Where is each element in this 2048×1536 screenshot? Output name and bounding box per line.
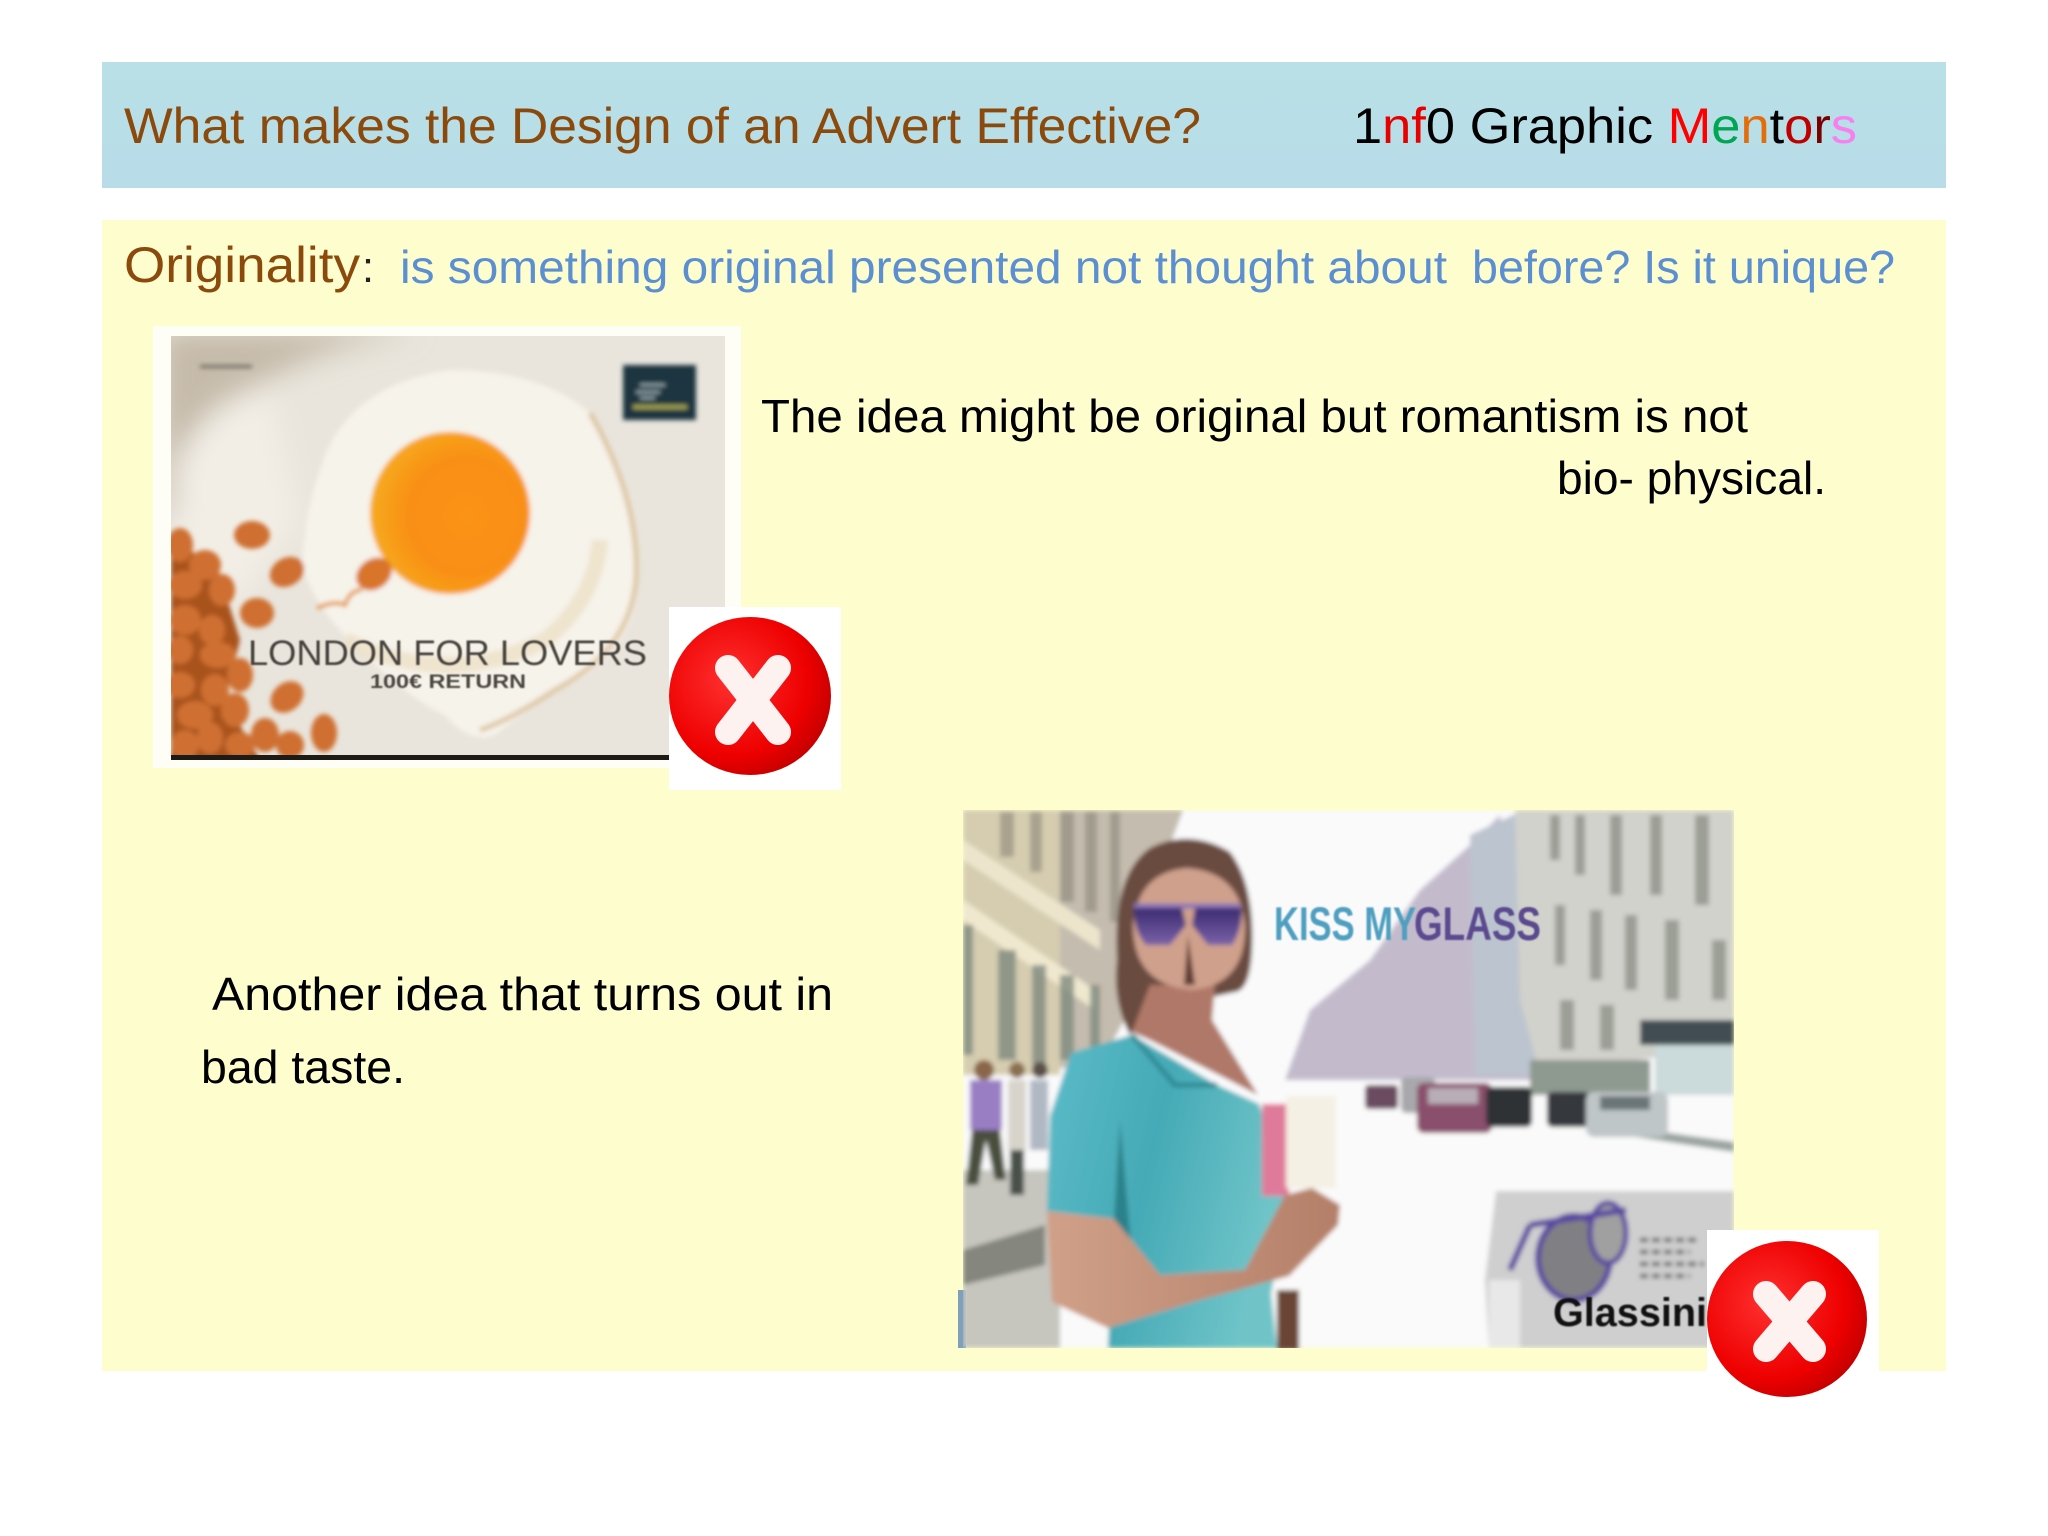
advert brand: Glassini <box>1553 1291 1707 1335</box>
cars <box>1365 1085 1398 1109</box>
baked beans <box>171 545 260 760</box>
woman: sunglasses <box>1134 904 1240 908</box>
brand name: 1nf0 Graphic Mentors: 1nf0 Graphic Mentors <box>1353 98 1857 154</box>
woman: bag strap <box>1277 1290 1299 1350</box>
question text, second part: before? Is it unique? <box>1472 241 1895 293</box>
heading: Originality: Originality <box>124 237 360 293</box>
text: comment on egg advert: The idea might be original but romantism is not <box>761 390 1748 442</box>
distant hazy buildings <box>1285 815 1540 1080</box>
advert slogan: KISS MY <box>1274 897 1416 950</box>
sidewalk <box>963 1170 1060 1348</box>
question text, first part: is something original presented not thought about <box>400 241 1447 293</box>
yolk <box>370 432 530 594</box>
photo: Kiss My Glass street advert <box>958 810 1734 1350</box>
advert headline: LONDON FOR LOVERS <box>248 634 647 673</box>
text: comment on egg advert <box>761 390 1826 504</box>
right building <box>1515 810 1734 1075</box>
woman: arm and hand <box>1047 1188 1340 1328</box>
text: comment on glasses advert <box>201 968 833 1093</box>
left building <box>1057 810 1184 1070</box>
icon: red cross for egg advert <box>669 607 841 790</box>
photo: Kiss My Glass street advert: GLASS <box>1414 897 1541 950</box>
airline logo <box>623 365 696 420</box>
poster with sunglasses <box>1485 1191 1734 1348</box>
panel: originality <box>102 220 1946 1371</box>
egg white <box>302 370 638 738</box>
colon: : <box>362 243 374 292</box>
woman: book <box>1262 1104 1289 1196</box>
sperm bean <box>317 590 362 608</box>
header banner <box>102 62 1946 188</box>
road <box>1665 1092 1734 1112</box>
icon: red cross for glasses advert <box>1707 1230 1879 1397</box>
heading: slide title: What makes the Design of an Advert Effective? <box>124 98 1201 154</box>
pedestrians <box>970 1080 1002 1130</box>
advert subline: 100€ RETURN <box>370 672 526 693</box>
text: comment on glasses advert: Another idea that turns out in <box>212 968 833 1020</box>
text: comment on egg advert: bio- physical. <box>1557 452 1826 504</box>
photo: London for Lovers egg advert <box>153 326 741 768</box>
woman: neck and face <box>1132 985 1258 1095</box>
text: comment on glasses advert: bad taste. <box>201 1041 405 1093</box>
woman: shirt <box>1047 1035 1289 1348</box>
woman: hair <box>1116 839 1252 1035</box>
